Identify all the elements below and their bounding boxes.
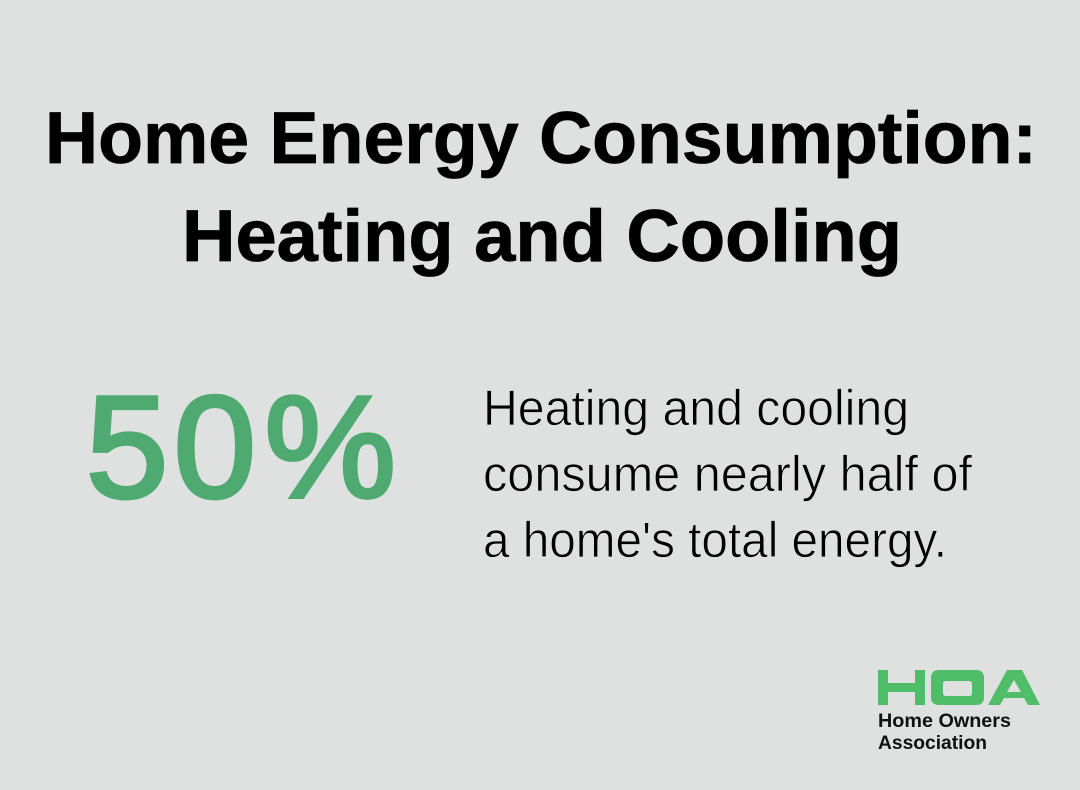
description text: a home's total energy. [483, 512, 947, 568]
logo: Home Owners Association [878, 670, 1040, 754]
description text: Heating and cooling [483, 380, 909, 436]
title: Heating and Cooling [182, 196, 902, 277]
title: Home Energy Consumption: [45, 98, 1037, 179]
logo text [878, 711, 1011, 754]
logo mark: HOA letters [878, 670, 1040, 705]
logo text: Association [878, 733, 987, 754]
title [45, 98, 1037, 277]
statistic: 50%: 50% [86, 366, 396, 529]
logo text: Home Owners [878, 711, 1011, 732]
description text [483, 380, 972, 568]
description text: consume nearly half of [483, 446, 972, 502]
